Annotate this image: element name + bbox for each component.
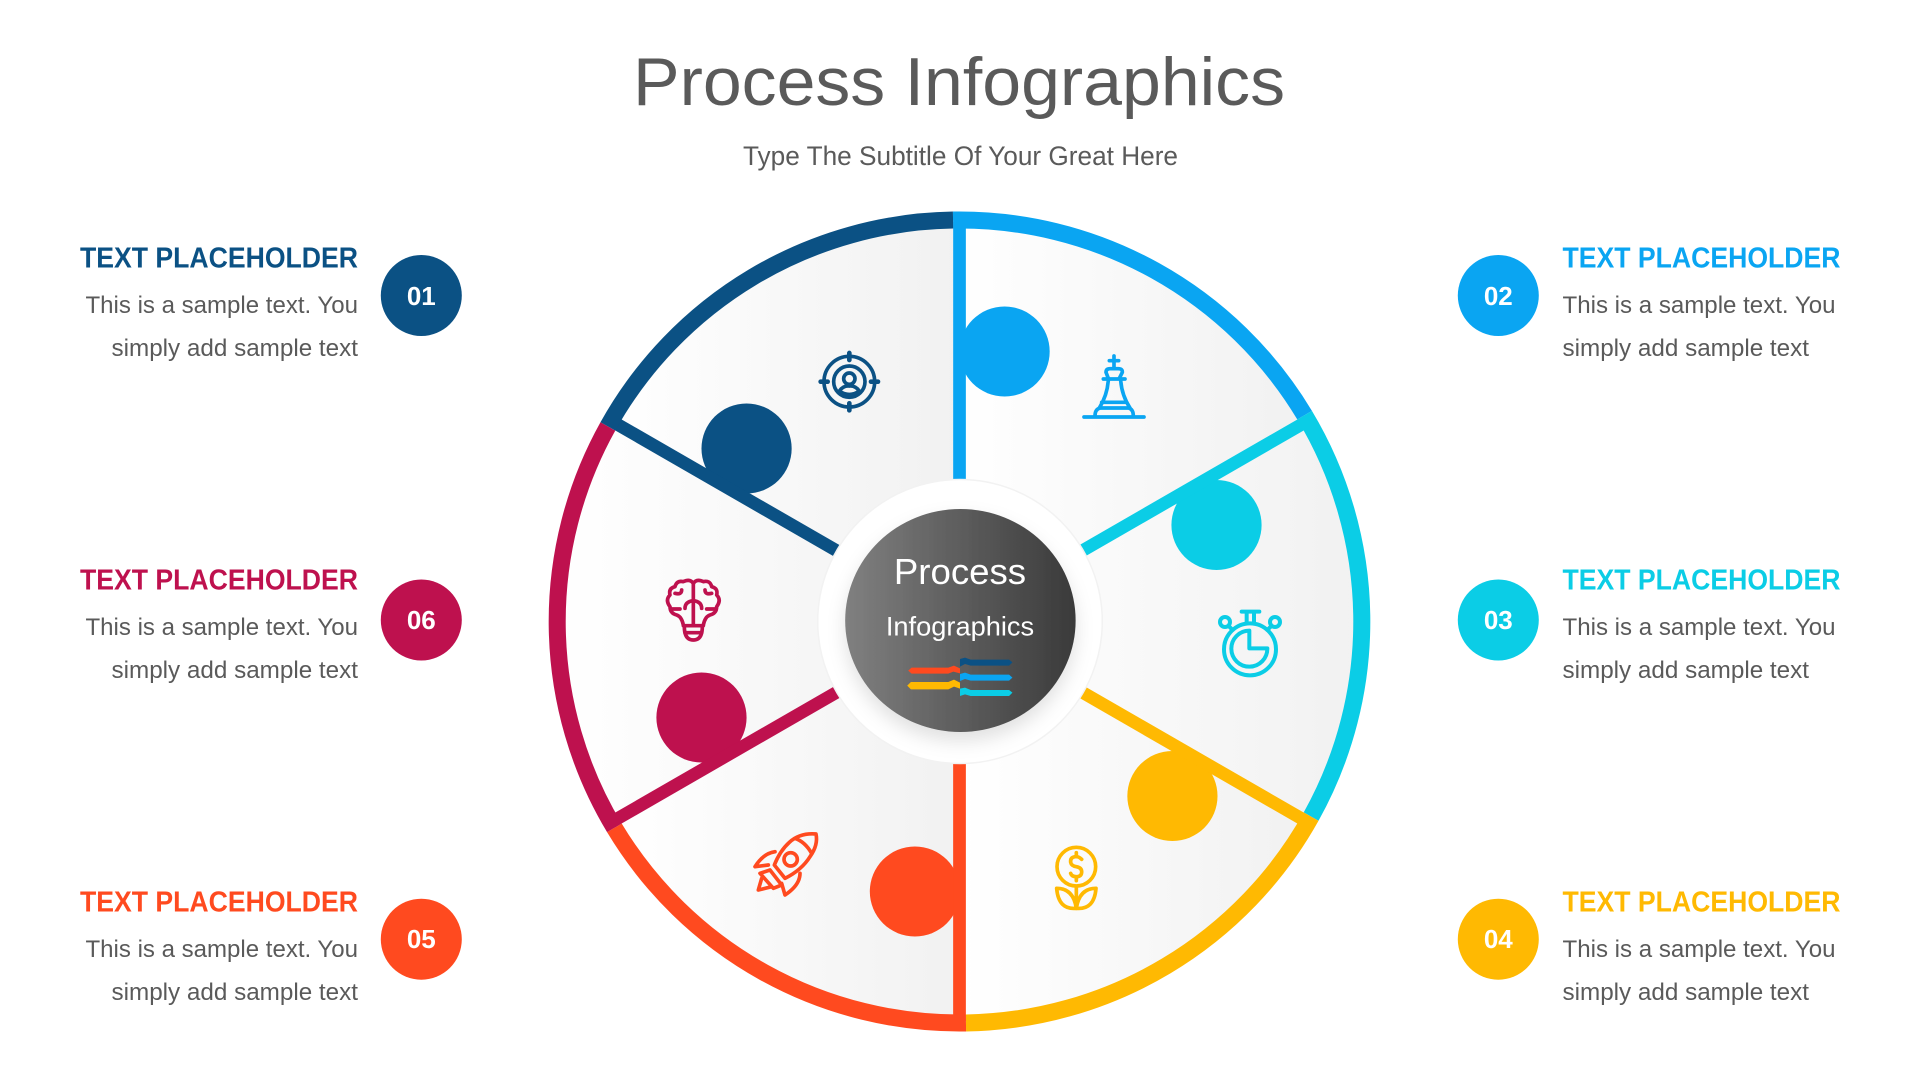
callout 01: simply add sample text: [112, 335, 358, 362]
callout 06: [80, 564, 462, 684]
segment 05: orange: [614, 622, 966, 1023]
callout 04: 04: [1484, 924, 1513, 954]
callout 05: This is a sample text. You: [86, 936, 358, 963]
center dark disc: [845, 509, 1076, 732]
icon: rocket: [755, 834, 817, 895]
center label: Process: Process: [894, 551, 1026, 592]
callout 05: simply add sample text: [112, 979, 358, 1006]
subtitle: Type The Subtitle Of Your Great Here: [743, 141, 1178, 171]
callout 06: This is a sample text. You: [86, 614, 358, 641]
callout 01: 01: [407, 281, 436, 311]
callout 06: simply add sample text: [112, 657, 358, 684]
callout 04: This is a sample text. You: [1562, 936, 1836, 963]
segment 06: crimson: [557, 426, 959, 828]
title: Process Infographics: [633, 44, 1285, 120]
callout 02: This is a sample text. You: [1562, 292, 1836, 319]
segment 02: blue: [953, 220, 1305, 622]
callout 03: [1458, 564, 1841, 684]
segment 04: yellow: [959, 622, 1311, 1023]
center label: Infographics: Infographics: [886, 612, 1034, 641]
callout 04: simply add sample text: [1562, 979, 1809, 1006]
callout 02: [1458, 242, 1841, 362]
callout 04: [1458, 886, 1841, 1006]
icon: target person: [821, 353, 878, 410]
icon: stopwatch: [1220, 612, 1280, 675]
callout 05: TEXT PLACEHOLDER: [80, 886, 358, 918]
callout 01: [80, 242, 462, 362]
callout 06: 06: [407, 605, 436, 635]
callout 01: TEXT PLACEHOLDER: [80, 242, 358, 274]
callout 03: 03: [1484, 605, 1513, 635]
callout 04: TEXT PLACEHOLDER: [1562, 886, 1841, 918]
callout 02: TEXT PLACEHOLDER: [1562, 242, 1841, 274]
icon: dollar flower: [1057, 847, 1096, 908]
callout 03: simply add sample text: [1562, 657, 1809, 684]
center mini arrows icon: [907, 658, 1012, 696]
callout 06: TEXT PLACEHOLDER: [80, 564, 358, 596]
callout 05: [80, 886, 462, 1006]
callout 02: simply add sample text: [1562, 335, 1809, 362]
segment 01: navy: [608, 220, 959, 622]
callout 05: 05: [407, 924, 436, 954]
center white ring: [818, 480, 1102, 764]
callout 02: 02: [1484, 281, 1513, 311]
segment 03: cyan: [959, 415, 1362, 817]
callout 01: This is a sample text. You: [86, 292, 358, 319]
icon: chess king: [1084, 356, 1144, 417]
callout 03: This is a sample text. You: [1562, 614, 1836, 641]
icon: brain: [667, 580, 719, 640]
process wheel: [557, 220, 1362, 1023]
callout 03: TEXT PLACEHOLDER: [1562, 564, 1841, 596]
